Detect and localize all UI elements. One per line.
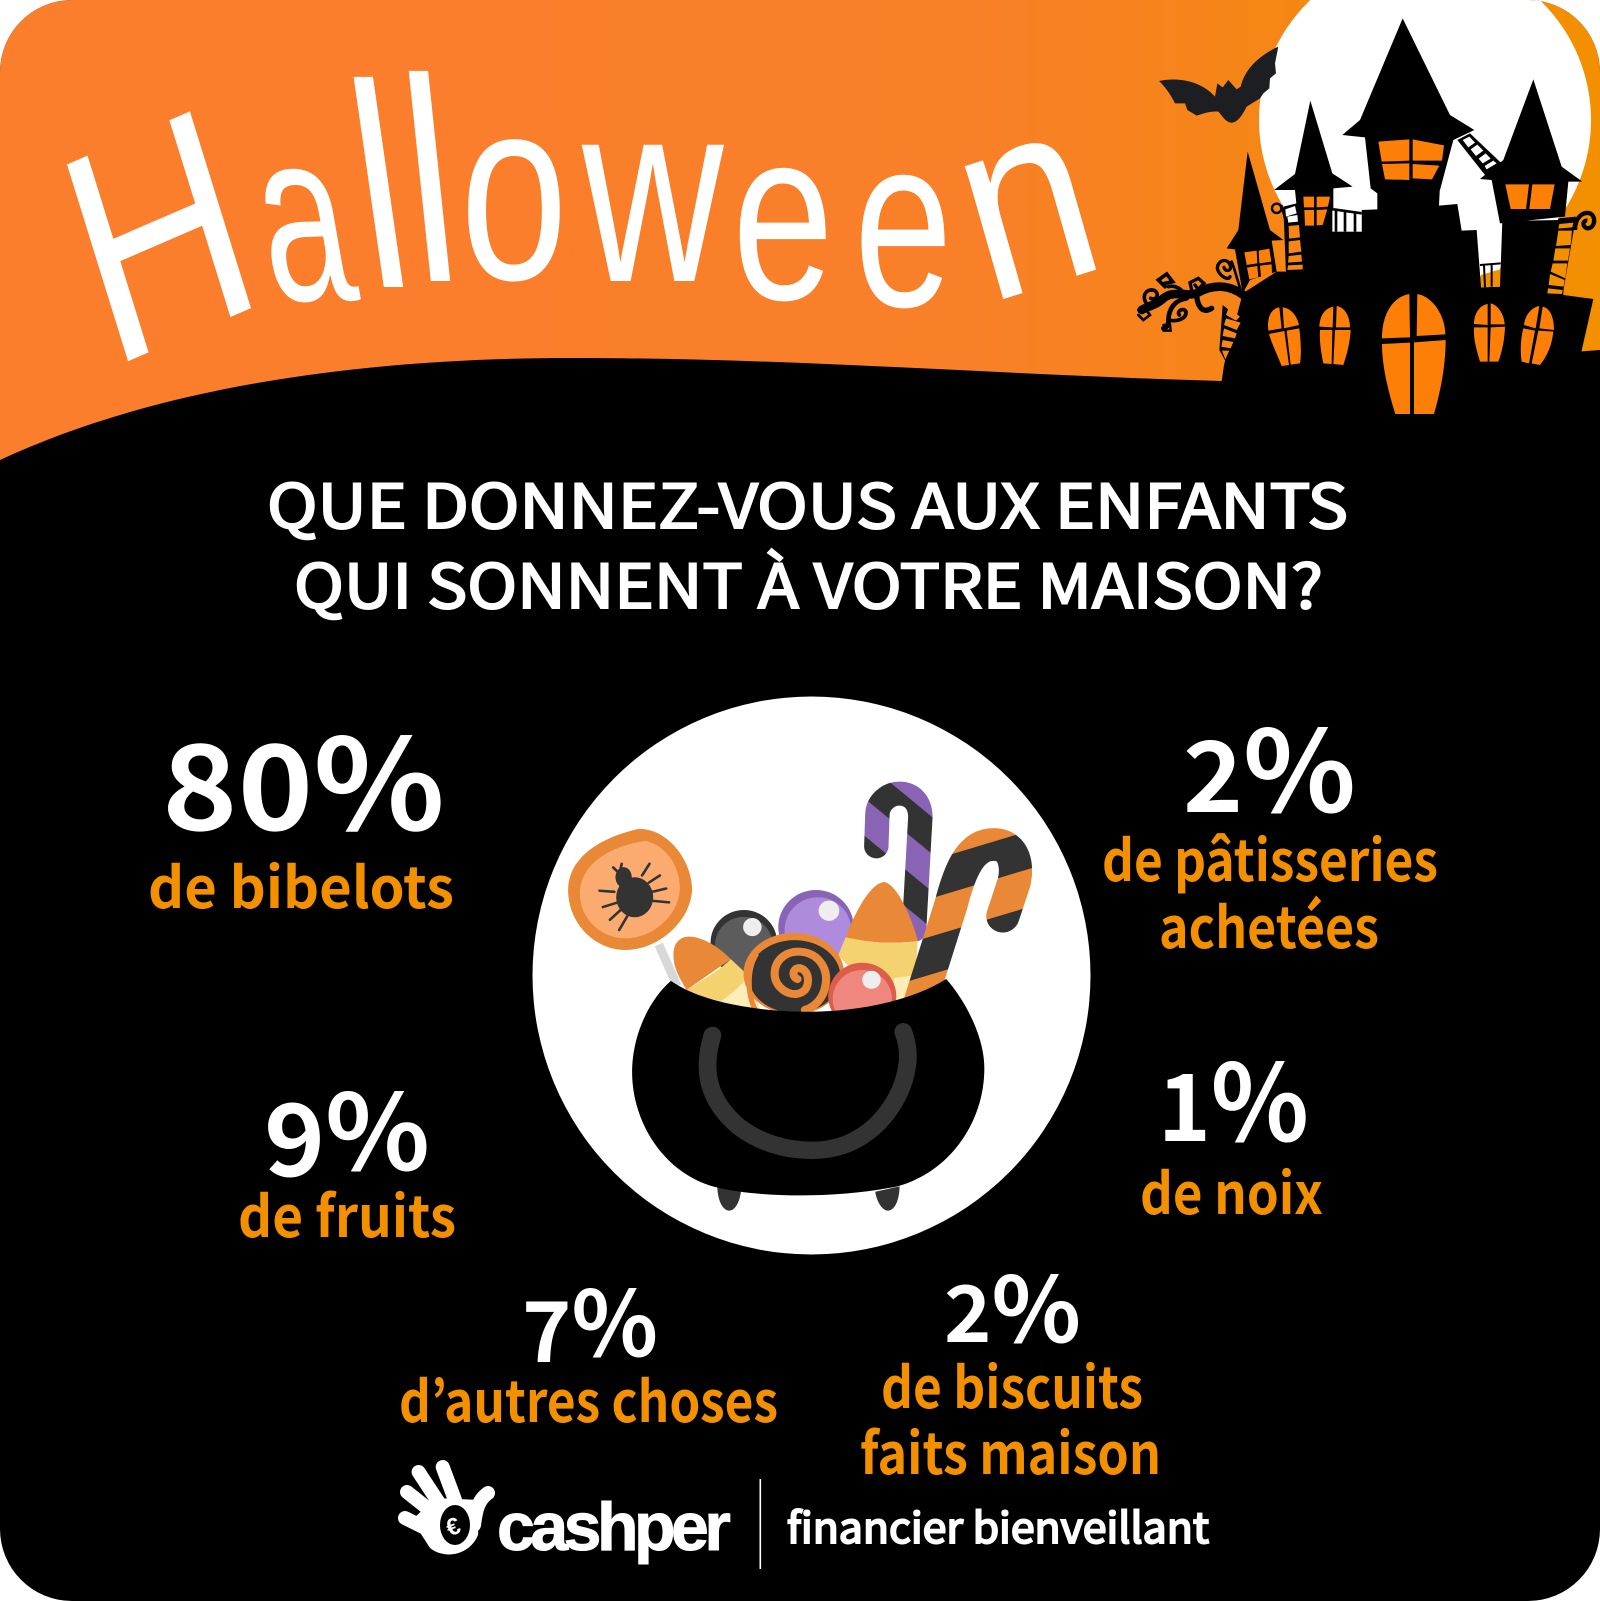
candy corn left bbox=[673, 937, 760, 1010]
house silhouette bbox=[1222, 18, 1600, 381]
stat: 9% de fruits bbox=[240, 1091, 454, 1238]
branch and spirals bbox=[1138, 260, 1243, 331]
icon: hand with euro coin bbox=[405, 1467, 488, 1554]
title bbox=[67, 70, 1096, 362]
stat: 2% de pâtisseries achetées: de pâtisseries bbox=[1102, 816, 1438, 898]
stat: 7% d'autres choses bbox=[401, 1288, 776, 1423]
icon: bat bbox=[1159, 47, 1278, 123]
stat: 2% de pâtisseries achetées: 2% bbox=[1183, 681, 1356, 845]
stat: 7% d'autres choses: % bbox=[571, 1252, 658, 1382]
moon bbox=[1259, 0, 1591, 286]
icon: cauldron of sweets bbox=[568, 794, 1015, 1211]
dark candy bbox=[711, 910, 777, 975]
small bars windows bbox=[1332, 209, 1501, 287]
stat: 1% de noix: 1% bbox=[1158, 1018, 1309, 1172]
stat: 2% de biscuits faits maison: 2% bbox=[944, 1238, 1081, 1368]
logo divider bbox=[760, 1479, 761, 1569]
cauldron legs bbox=[717, 1186, 900, 1211]
title: o bbox=[460, 43, 568, 335]
right stair bbox=[1547, 213, 1594, 295]
stat: 2% de biscuits faits maison: de biscuits bbox=[881, 1343, 1143, 1425]
stat: 2% de biscuits faits maison bbox=[861, 1274, 1158, 1475]
logo: cashper: cashper bbox=[497, 1489, 730, 1565]
purple candy bbox=[778, 890, 853, 955]
stat: 9% de fruits: 9 bbox=[264, 1060, 323, 1205]
cauldron handle bbox=[708, 1032, 908, 1150]
haunted house illustration bbox=[1138, 18, 1600, 430]
candy corn right bbox=[838, 882, 918, 1010]
title: l bbox=[388, 18, 471, 343]
stat: 2% de biscuits faits maison: faits maison bbox=[860, 1409, 1161, 1491]
title: w bbox=[581, 48, 724, 336]
logo: cashper bbox=[405, 1467, 730, 1565]
stat: 7% d'autres choses: d’autres choses bbox=[399, 1357, 778, 1439]
swirl candy bbox=[743, 933, 844, 1014]
title: H bbox=[30, 42, 288, 430]
stat: 2% de pâtisseries achetées: achetées bbox=[1159, 883, 1379, 965]
title: a bbox=[233, 80, 370, 353]
heading: QUI SONNENT À VOTRE MAISON? bbox=[294, 537, 1323, 626]
stat: 80% de bibelots: 80% bbox=[162, 685, 445, 867]
title: n bbox=[923, 38, 1126, 358]
stat: 2% de pâtisseries achetées bbox=[1104, 727, 1436, 949]
heading bbox=[270, 482, 1346, 620]
lollipop with spider bbox=[568, 829, 692, 986]
stat: 1% de noix bbox=[1142, 1061, 1322, 1215]
stat: 80% de bibelots bbox=[150, 735, 452, 909]
stat: 7% d'autres choses: 7 bbox=[522, 1266, 572, 1387]
lit windows bbox=[1244, 139, 1555, 414]
header: orange wave bbox=[0, 0, 1600, 460]
ladder between towers bbox=[1457, 133, 1502, 175]
title: l bbox=[331, 24, 427, 349]
red candy bbox=[828, 962, 896, 1011]
stat: 80% de bibelots: de bibelots bbox=[148, 843, 454, 925]
title: e bbox=[854, 86, 952, 359]
heading: QUE DONNEZ-VOUS AUX ENFANTS bbox=[267, 457, 1348, 546]
stat: 9% de fruits: de fruits bbox=[238, 1172, 456, 1254]
lower left stair bbox=[1219, 305, 1242, 363]
stat: 9% de fruits: % bbox=[325, 1049, 430, 1201]
icon: hand with euro coin: € bbox=[442, 1512, 464, 1542]
orange candy cane bbox=[918, 845, 1015, 1010]
cauldron body bbox=[632, 979, 984, 1195]
title: e bbox=[732, 78, 834, 351]
tagline: financier bienveillant bbox=[787, 1495, 1209, 1556]
purple candy cane bbox=[876, 794, 920, 930]
stat: 1% de noix: de noix bbox=[1140, 1149, 1323, 1231]
left stair bbox=[1272, 203, 1304, 273]
moon circle with cauldron bbox=[532, 696, 1090, 1254]
